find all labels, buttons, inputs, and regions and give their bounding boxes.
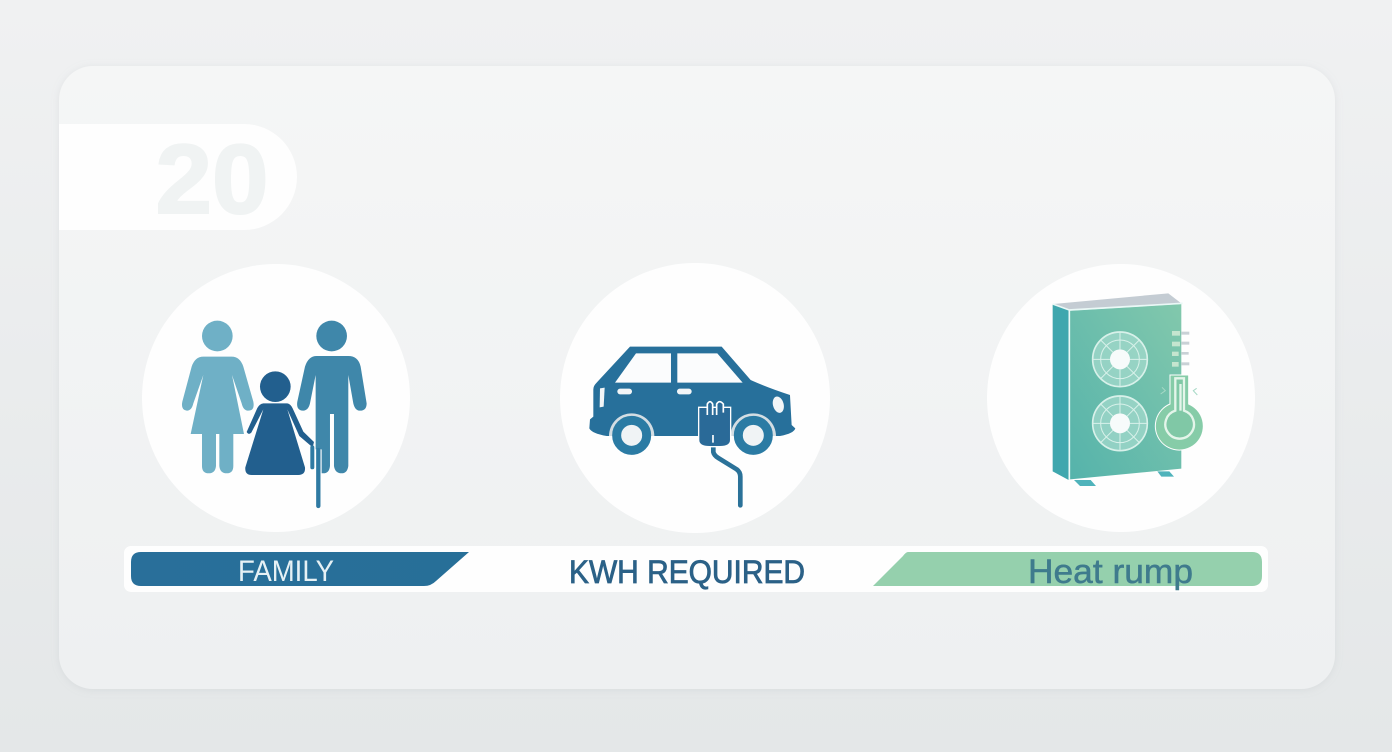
child figure with cane	[245, 371, 318, 506]
icon: electric car	[589, 347, 795, 505]
panel: main card	[59, 66, 1335, 689]
panel: family circle	[142, 264, 410, 532]
thermometer	[1155, 375, 1203, 450]
upper fan	[1093, 332, 1147, 387]
car windows	[615, 353, 743, 383]
rear wheel	[731, 413, 776, 450]
man figure	[297, 321, 367, 473]
charging plug and cable	[699, 402, 740, 505]
label: kwh required: KWH REQUIRED	[569, 554, 805, 590]
unit casing	[1053, 293, 1183, 480]
icon: family	[182, 321, 367, 506]
label strip	[124, 546, 1268, 592]
front wheel	[609, 413, 654, 450]
panel: heat pump circle	[987, 264, 1255, 532]
badge number: 20	[156, 124, 268, 234]
control indicators	[1172, 331, 1189, 367]
lower fan	[1093, 396, 1147, 451]
woman figure	[182, 321, 254, 473]
car handles and lights	[600, 388, 786, 414]
panel: car circle	[560, 263, 830, 533]
label: heat pump	[873, 552, 1262, 591]
label: family: FAMILY	[238, 555, 334, 588]
icon: heat pump	[1053, 293, 1203, 486]
unit feet	[1074, 471, 1174, 486]
label: heat pump: Heat rump	[1028, 553, 1193, 591]
label: family	[131, 552, 469, 588]
car body	[589, 347, 795, 436]
number badge	[59, 124, 297, 234]
